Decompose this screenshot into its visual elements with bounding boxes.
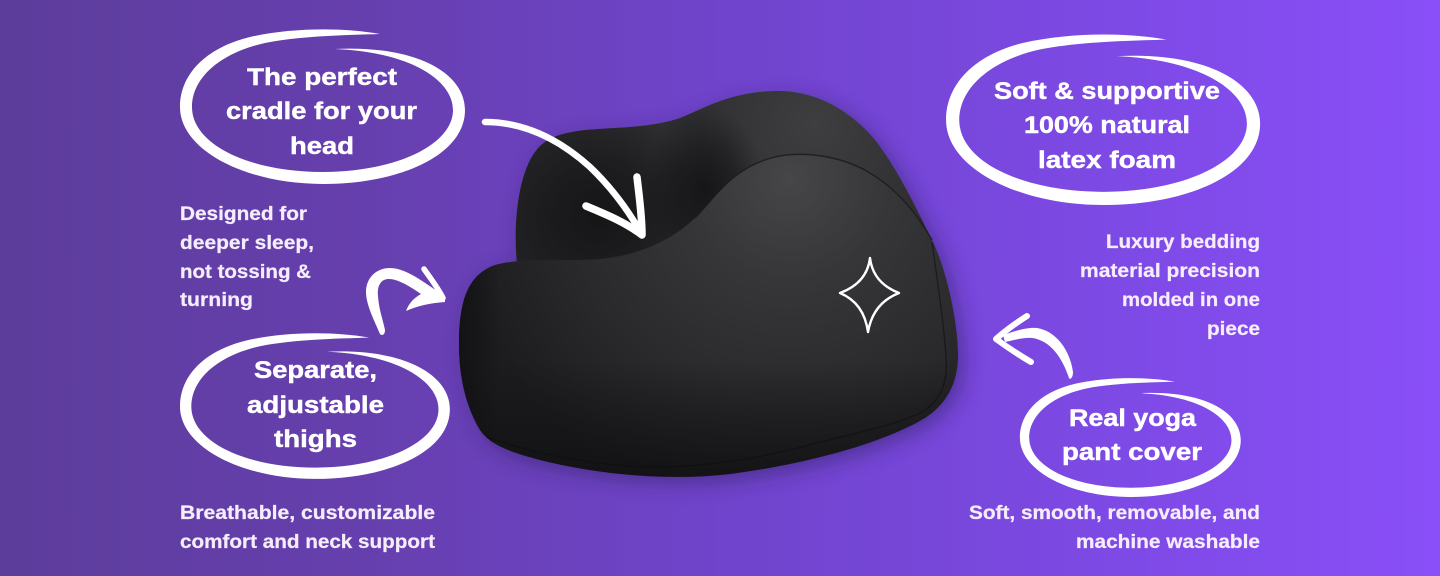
text: breathable comfort: comfort and neck support: [180, 531, 436, 553]
text: luxury bedding material: [1080, 231, 1260, 340]
pillow seams: [487, 242, 946, 467]
heading text: latex foam: [1038, 147, 1176, 174]
heading text: Separate,: [254, 357, 377, 384]
brush oval: [180, 333, 450, 479]
text: luxury bedding material: Luxury bedding: [1106, 231, 1260, 253]
heading text: head: [290, 133, 354, 160]
heading text: [247, 357, 384, 453]
pillow front section: [459, 156, 958, 477]
text: breathable comfort: Breathable, customizable: [180, 502, 435, 524]
callout: perfect cradle: [180, 29, 465, 184]
text: soft smooth removable: Soft, smooth, removable, and: [969, 502, 1260, 524]
brush oval: [180, 29, 465, 184]
brush oval: [1020, 378, 1241, 497]
heading text: [226, 64, 418, 160]
text: designed for deeper sleep: turning: [180, 289, 253, 311]
heading text: pant cover: [1062, 439, 1203, 466]
text: designed for deeper sleep: Designed for: [180, 203, 307, 225]
heading text: [1062, 405, 1203, 466]
heading text: [994, 78, 1220, 174]
heading text: The perfect: [247, 64, 397, 91]
callout: adjustable thighs: [180, 333, 450, 479]
text: designed for deeper sleep: not tossing &: [180, 261, 311, 283]
arrow: yoga cover callout to pillow: [996, 316, 1073, 379]
pillow back section: [516, 91, 932, 262]
brush oval: [946, 35, 1260, 205]
heading text: thighs: [274, 426, 357, 453]
heading text: Soft & supportive: [994, 78, 1220, 105]
text: designed for deeper sleep: [180, 203, 314, 311]
arrow: thighs callout to pillow: [366, 268, 445, 335]
text: designed for deeper sleep: deeper sleep,: [180, 232, 314, 254]
icon: sparkle logo on pillow: [840, 258, 899, 332]
arrow: cradle callout to pillow recess: [485, 122, 642, 235]
text: luxury bedding material: material precision: [1080, 260, 1260, 282]
heading text: adjustable: [247, 392, 384, 419]
text: luxury bedding material: piece: [1207, 318, 1260, 340]
heading text: 100% natural: [1024, 112, 1190, 139]
text: luxury bedding material: molded in one: [1122, 289, 1260, 311]
text: breathable comfort: [180, 502, 436, 553]
pillow product: [450, 80, 970, 490]
callout: yoga pant cover: [1020, 378, 1241, 497]
heading text: cradle for your: [226, 98, 418, 125]
text: soft smooth removable: machine washable: [1076, 531, 1260, 553]
heading text: Real yoga: [1069, 405, 1196, 432]
callout: soft and supportive latex: [946, 35, 1260, 205]
text: soft smooth removable: [969, 502, 1260, 553]
